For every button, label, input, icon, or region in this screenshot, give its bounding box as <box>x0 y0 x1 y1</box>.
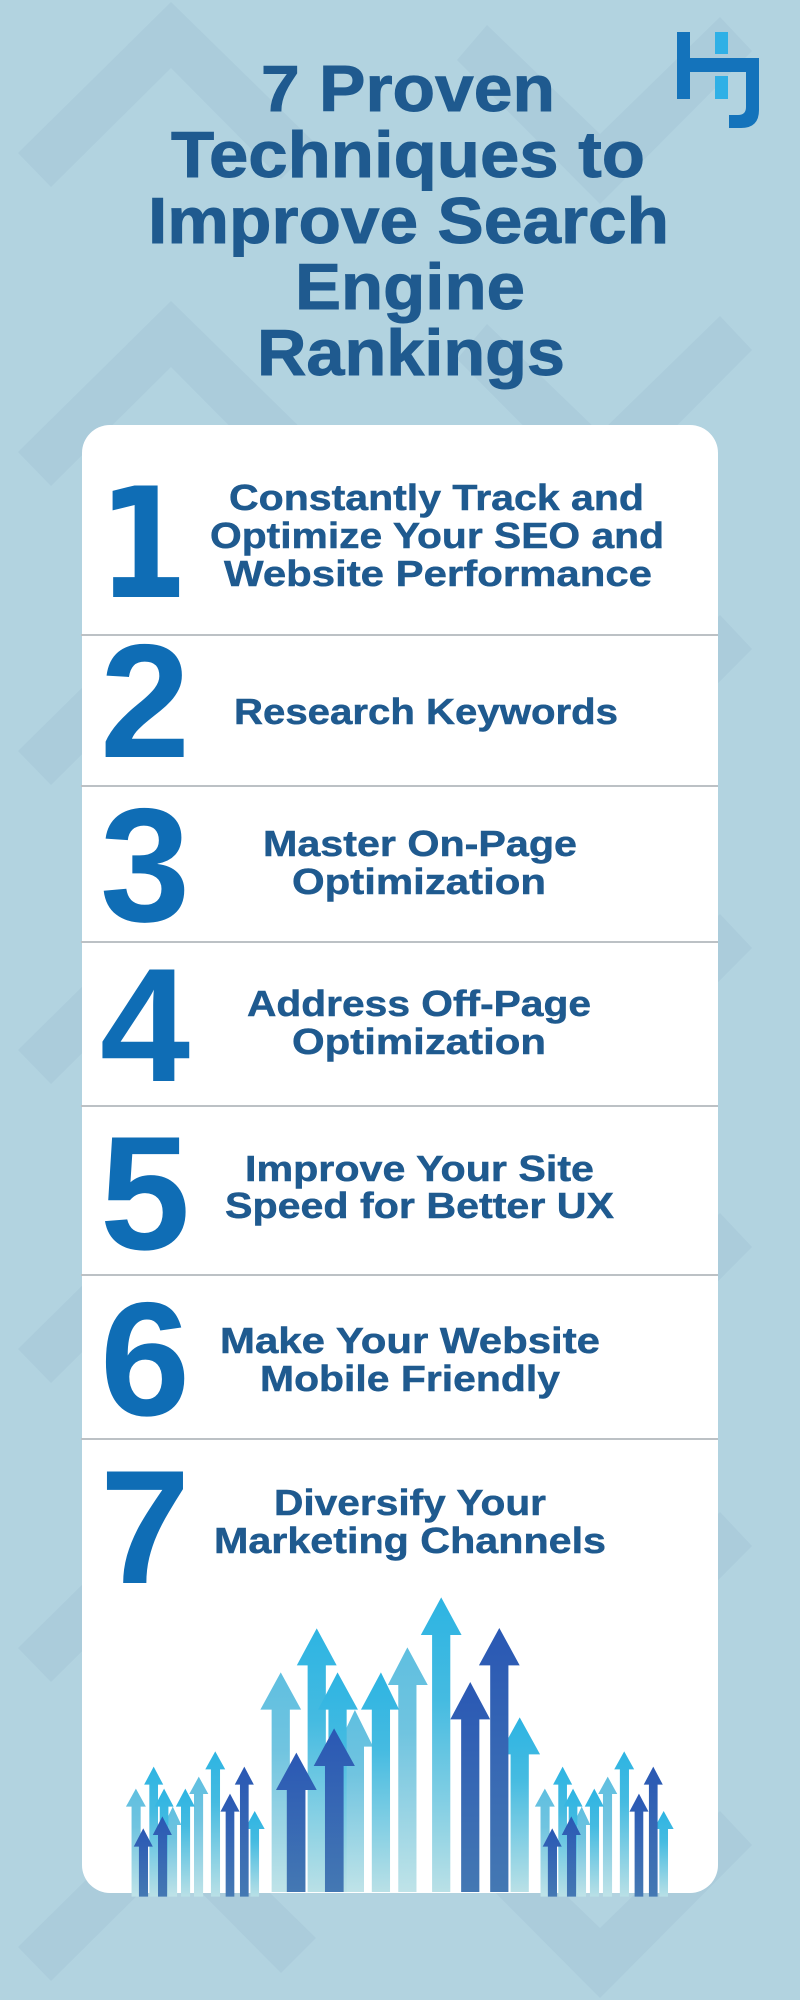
item 7: Marketing Channels <box>214 1520 606 1561</box>
item 2 <box>100 611 618 792</box>
item 2: Research Keywords <box>234 691 618 732</box>
item 6: Make Your Website <box>220 1320 600 1361</box>
item 1: 1 <box>98 456 188 634</box>
icon: rising arrows <box>126 1597 674 1897</box>
item 6 <box>100 1269 600 1450</box>
left arrow cluster <box>126 1751 265 1897</box>
item 4: Optimization <box>292 1021 546 1062</box>
item 1: Constantly Track and <box>229 477 644 518</box>
logo <box>677 32 759 128</box>
item 3: Optimization <box>292 861 546 902</box>
title: Improve Search <box>148 184 669 257</box>
panel: techniques list <box>81 425 718 1893</box>
item 1: Optimize Your SEO and <box>210 515 664 556</box>
item 6: Mobile Friendly <box>260 1358 560 1399</box>
central arrow cluster <box>260 1597 540 1892</box>
title: Techniques to <box>171 118 645 191</box>
item 5 <box>100 1103 614 1284</box>
item 5: Improve Your Site <box>245 1148 594 1189</box>
item 4: Address Off-Page <box>247 983 591 1024</box>
item 4 <box>100 935 591 1116</box>
title: Engine <box>295 250 525 323</box>
title: Rankings <box>257 316 565 389</box>
item 2: 2 <box>100 611 190 792</box>
item 7: 7 <box>100 1437 190 1618</box>
item 3 <box>100 775 577 956</box>
item 1: Website Performance <box>224 553 652 594</box>
title: 7 Proven <box>261 52 555 125</box>
item 3: Master On-Page <box>263 823 577 864</box>
item 4: 4 <box>100 935 190 1116</box>
title <box>148 52 669 389</box>
item 5: 5 <box>100 1103 190 1284</box>
item 3: 3 <box>100 775 190 956</box>
item 1 <box>98 456 664 634</box>
item 5: Speed for Better UX <box>225 1185 614 1226</box>
item 7: Diversify Your <box>274 1482 546 1523</box>
item 6: 6 <box>100 1269 190 1450</box>
item 7 <box>100 1437 606 1618</box>
right arrow cluster <box>535 1751 674 1897</box>
